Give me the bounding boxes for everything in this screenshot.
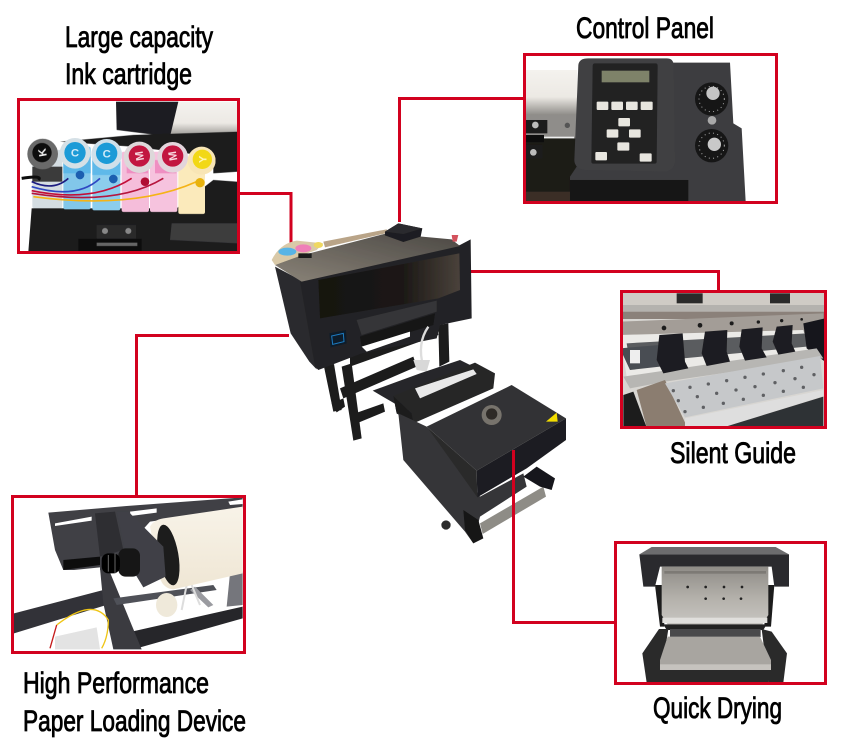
ink tubes xyxy=(22,171,205,201)
connector: quick drying to dryer xyxy=(514,450,614,622)
dryer middle block xyxy=(393,363,495,423)
drive arm and hub xyxy=(95,512,166,587)
heading: High Performance Paper Loading Device xyxy=(23,667,246,738)
connector: control panel to printer xyxy=(400,98,523,222)
keypad housing xyxy=(574,58,675,172)
dryer roller bar xyxy=(441,467,555,543)
panel frame: quick drying xyxy=(616,542,826,684)
ink caps: C xyxy=(71,148,79,160)
panel: paper loading device photo xyxy=(11,495,246,654)
printer top xyxy=(275,233,460,282)
heading: High Performance Paper Loading Device: Paper Loading Device xyxy=(23,705,246,738)
printer front xyxy=(300,239,472,370)
panel: ink cartridge photo xyxy=(17,98,240,254)
heading: Quick Drying: Quick Drying xyxy=(653,692,782,725)
dryer rear shelf xyxy=(373,360,473,407)
panel: silent guide photo xyxy=(620,290,827,430)
ink caps: Y xyxy=(197,155,209,163)
ink caps xyxy=(27,138,216,175)
heading: Large capacity Ink cartridge xyxy=(65,21,213,91)
ink caps: M xyxy=(167,150,180,162)
heading: Silent Guide: Silent Guide xyxy=(670,437,796,470)
heading: Control Panel: Control Panel xyxy=(576,12,714,45)
paper exit xyxy=(357,301,437,372)
dryer unit xyxy=(373,360,566,543)
heading: Large capacity Ink cartridge: Ink cartridge xyxy=(65,58,192,91)
printer screen xyxy=(329,330,347,347)
panel frame: control panel xyxy=(524,54,776,202)
ink tanks on top xyxy=(272,229,458,265)
printer window xyxy=(318,253,460,318)
ink caps: M xyxy=(134,150,147,162)
connector: ink cartridge to printer xyxy=(240,194,291,243)
connector overlay: drying line on lid xyxy=(512,450,515,552)
heading: High Performance Paper Loading Device: High Performance xyxy=(23,667,209,700)
pinch rollers xyxy=(657,325,795,373)
connector: paper loading device to printer xyxy=(136,336,289,495)
panel: quick drying photo xyxy=(639,547,789,682)
printer with stand xyxy=(272,223,472,441)
printer legs xyxy=(324,323,449,441)
wires and label xyxy=(50,609,108,649)
panel frame: paper loading device xyxy=(12,496,244,652)
ink caps: K xyxy=(36,147,50,158)
ink caps: C xyxy=(103,148,111,160)
lower frame bars xyxy=(14,568,243,649)
dryer lid xyxy=(427,385,566,497)
heading: Large capacity Ink cartridge: Large capacity xyxy=(65,21,213,54)
panel frame: ink cartridge xyxy=(18,100,238,252)
dryer side xyxy=(398,413,527,543)
paper roll xyxy=(150,507,243,589)
panel frame: silent guide xyxy=(622,292,826,428)
connector: silent guide to printer xyxy=(470,272,718,291)
top control box xyxy=(385,223,422,242)
ink tanks xyxy=(32,147,205,214)
printer left side xyxy=(275,267,317,369)
panel: control panel photo xyxy=(526,58,746,201)
guide plate holes xyxy=(672,366,816,413)
knobs xyxy=(695,82,728,162)
